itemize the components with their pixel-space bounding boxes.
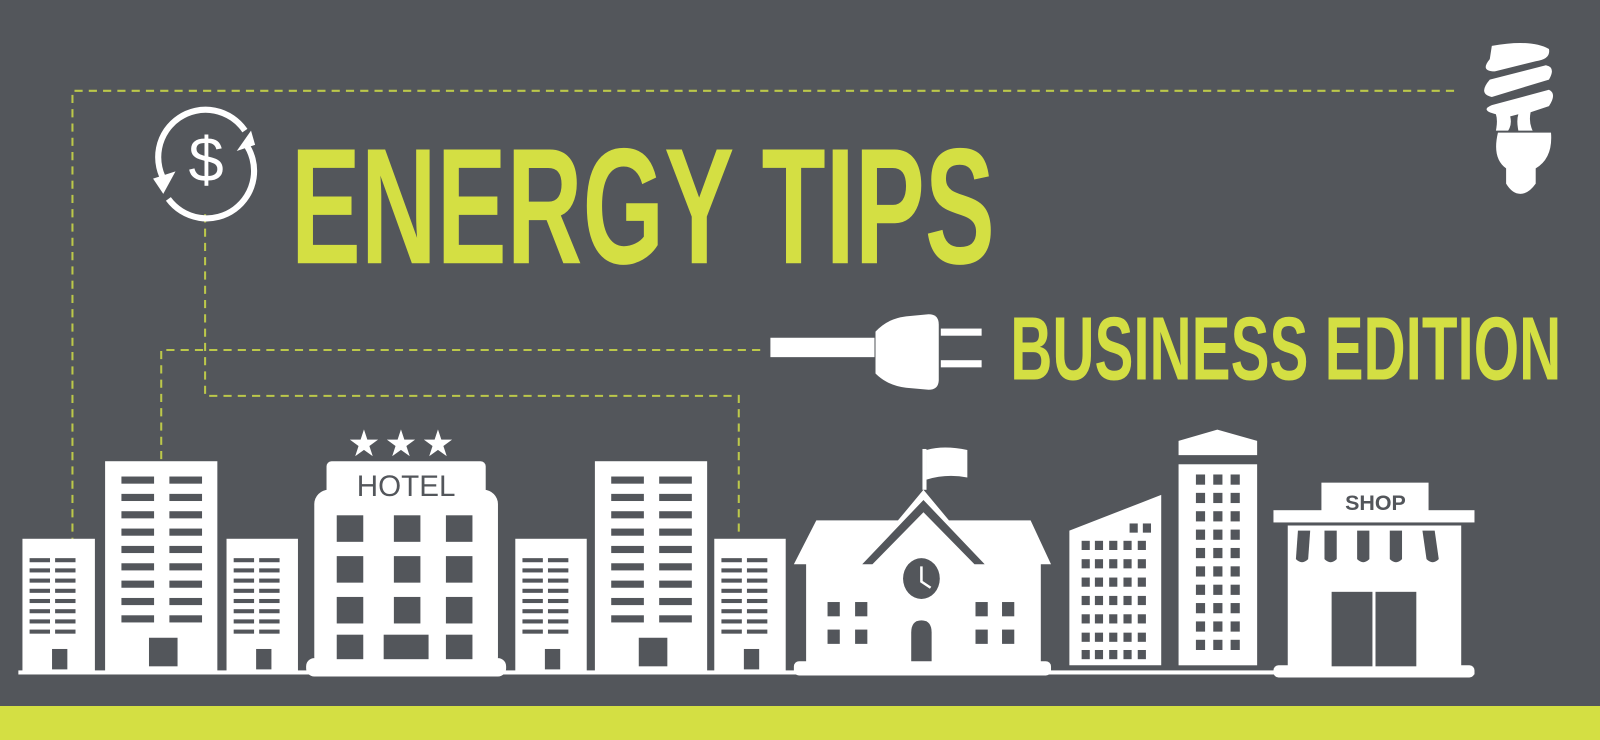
- building: small mid 2: [714, 539, 786, 671]
- ground line: [18, 670, 1474, 674]
- building: hotel: [306, 422, 506, 677]
- building: tall left: [105, 461, 217, 671]
- title: ENERGY TIPS: [291, 114, 995, 299]
- building: hotel: HOTEL: [357, 470, 455, 503]
- building: tall mid: [595, 461, 707, 671]
- tall building windows: [121, 477, 202, 666]
- icon: dollar cycle: $: [189, 126, 224, 196]
- icon: light bulb: [1484, 43, 1553, 194]
- icon: dollar cycle: [153, 110, 255, 218]
- building: small left 2: [227, 539, 298, 671]
- dashed connector lines: [72, 91, 1454, 539]
- building: slanted tower: [1069, 495, 1161, 665]
- building: hotel: ★★★: [348, 422, 459, 465]
- school details: [828, 500, 1014, 661]
- tall tower windows: [1196, 474, 1240, 650]
- hotel windows: [337, 515, 472, 659]
- building: tall tower: [1179, 430, 1257, 665]
- bottom band: [0, 706, 1600, 740]
- building: small mid 1: [515, 539, 587, 671]
- building: shop: [1273, 483, 1474, 678]
- building: small left 1: [22, 539, 95, 671]
- clock hands: [921, 566, 931, 588]
- building: school: [794, 447, 1051, 676]
- slanted tower windows: [1082, 523, 1151, 659]
- buildings skyline: [18, 422, 1474, 678]
- building: shop: SHOP: [1345, 491, 1406, 515]
- small building windows: [30, 558, 76, 669]
- shop awning & doors: [1296, 531, 1439, 666]
- windows (dark cutouts): [30, 474, 1439, 669]
- icon: plug: [770, 314, 982, 390]
